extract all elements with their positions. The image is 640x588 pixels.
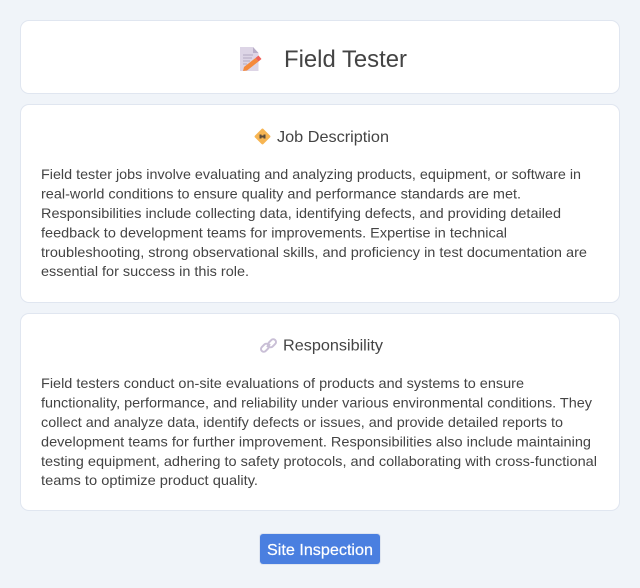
icon: chain link [260, 338, 277, 353]
icon: diamond road sign [254, 128, 270, 144]
text block: job description: essential for success in this role. [41, 263, 249, 279]
heading: responsibility: Responsibility [283, 338, 383, 354]
text block: job description: Responsibilities include collecting data, identifying defects, and providing detailed [41, 205, 561, 221]
title: Field Tester [284, 46, 407, 73]
heading: job description: Job Description [277, 129, 389, 146]
text block: job description: feedback to development teams for improvements. Expertise in technical [41, 224, 507, 240]
panel: responsibility [20, 313, 620, 511]
text block: job description [41, 166, 587, 279]
panel: job description [20, 104, 620, 303]
icon: document with pencil [240, 47, 262, 71]
text block: responsibility: Field testers conduct on-site evaluations of products and systems to ensure [41, 375, 524, 391]
text block: responsibility: development teams for further improvement. Responsibilities also include maintaining [41, 434, 591, 450]
text block: responsibility: functionality, performance, and reliability under various environmental conditions. They [41, 394, 592, 410]
button: site inspection [260, 534, 380, 564]
text block: job description: troubleshooting, strong observational skills, and proficiency in test documentation are [41, 244, 587, 260]
panel: title card [20, 20, 620, 94]
text block: job description: real-world conditions to ensure quality and performance standards are met. [41, 186, 521, 202]
text block: responsibility: testing equipment, adhering to safety protocols, and collaborating with cross-functional [41, 453, 597, 469]
text block: responsibility: collect and analyze data, identify defects or issues, and provide detailed reports to [41, 414, 563, 430]
button: site inspection: Site Inspection [267, 542, 373, 559]
text block: job description: Field tester jobs involve evaluating and analyzing products, equipment, or software in [41, 166, 581, 182]
text block: responsibility [41, 375, 597, 488]
text block: responsibility: teams to optimize product quality. [41, 472, 258, 488]
